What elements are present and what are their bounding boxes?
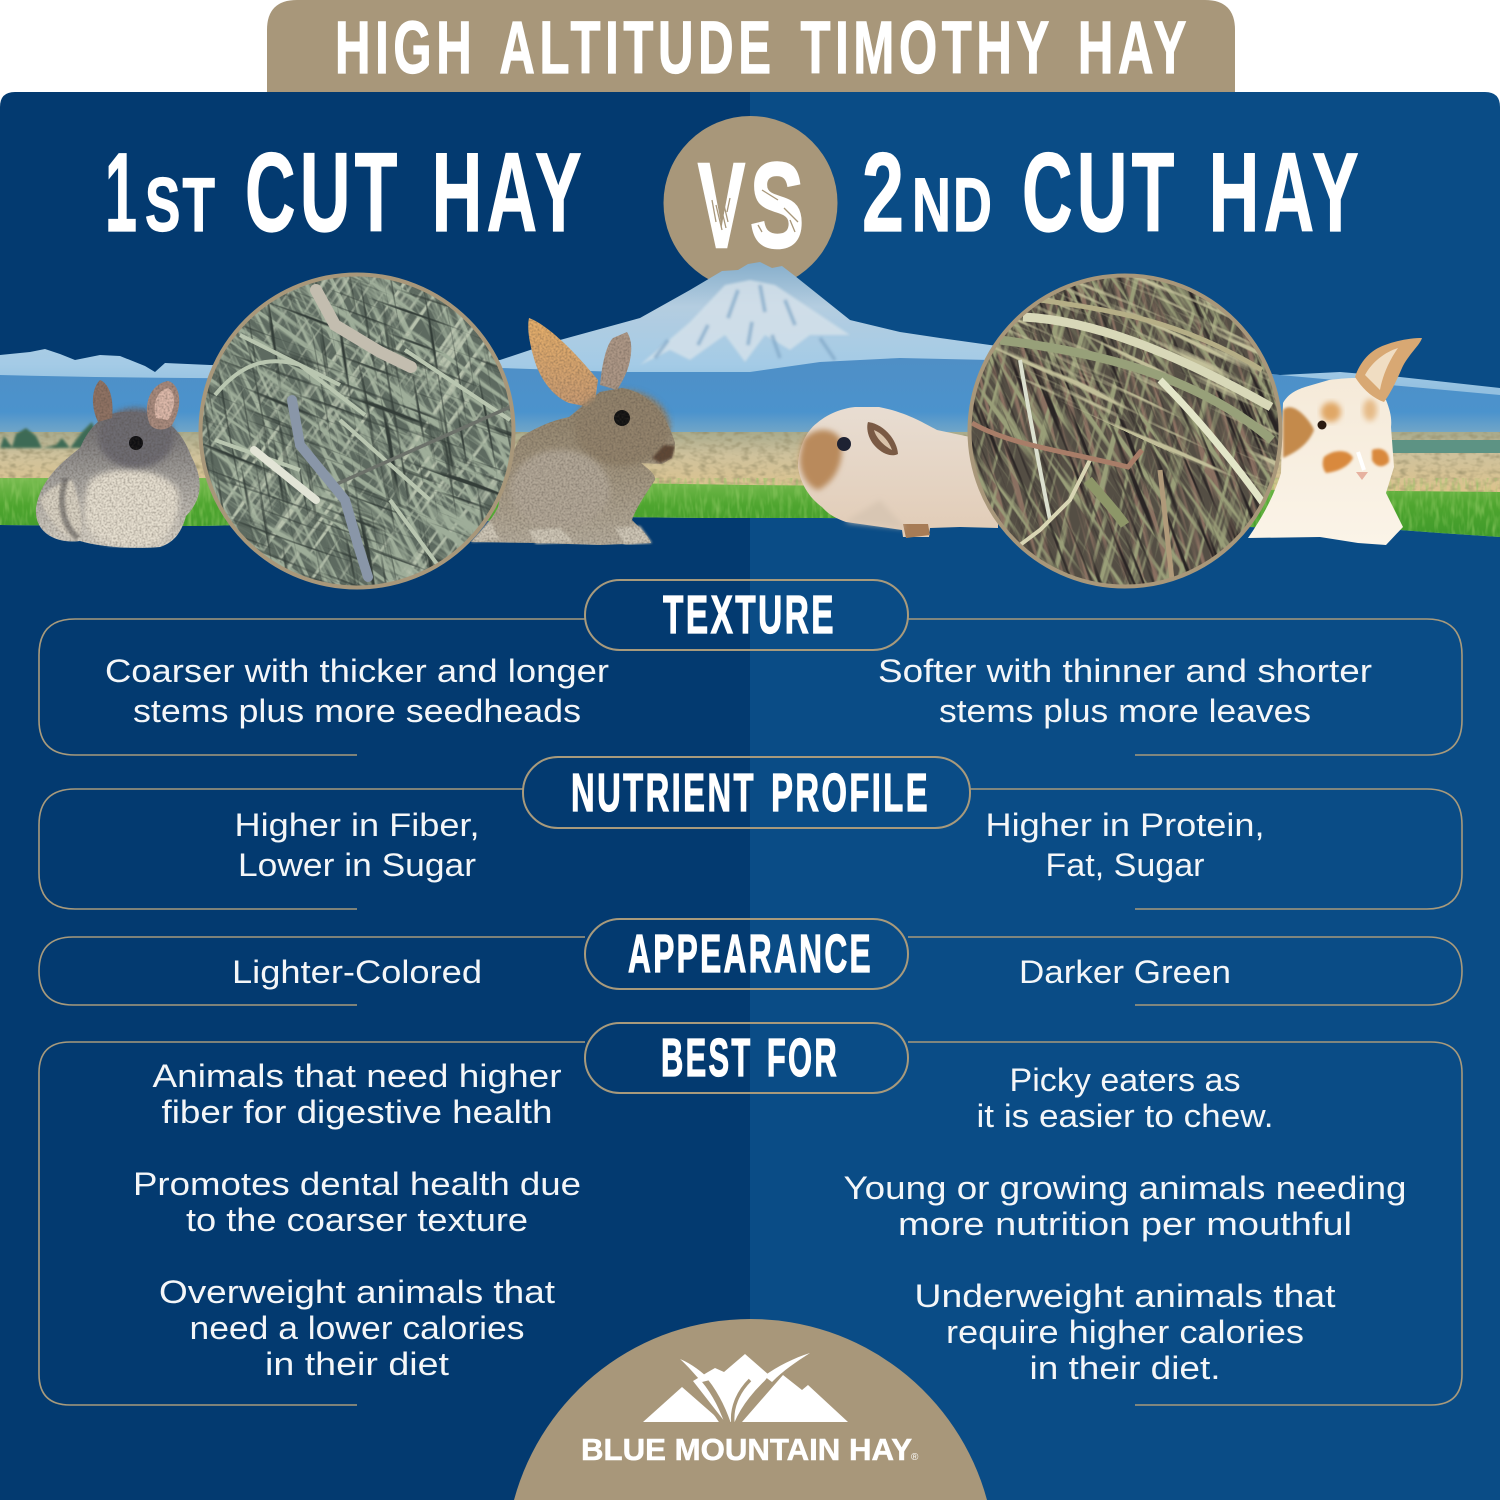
- pill: nutrient profile: [523, 757, 970, 828]
- heading: 2nd cut hay: 2: [862, 130, 904, 255]
- text: 1st cut best for: [133, 1058, 581, 1382]
- text: 2nd cut best for: Picky eaters as: [1010, 1062, 1240, 1098]
- text: 2nd cut best for: [844, 1062, 1406, 1386]
- section: nutrient profile: [39, 757, 1462, 909]
- light stems: [1023, 317, 1271, 407]
- heading: 1st cut hay: 1: [105, 130, 137, 255]
- text: 1st cut best for: Animals that need higher: [152, 1058, 562, 1094]
- text: 2nd cut texture: Softer with thinner and shorter: [878, 653, 1372, 689]
- pill: appearance: APPEARANCE: [628, 924, 873, 984]
- text: 1st cut best for: Overweight animals that: [159, 1274, 555, 1310]
- panel: background left 1st cut: [0, 92, 750, 1500]
- seedhead: pale: [254, 450, 316, 500]
- text: 2nd cut best for: require higher calories: [946, 1314, 1304, 1350]
- text: 1st cut appearance: Lighter-Colored: [232, 954, 482, 990]
- heading: 1st cut hay: [105, 130, 586, 255]
- logo: Blue Mountain Hay badge: [514, 1319, 987, 1500]
- pill: best for: [585, 1023, 908, 1093]
- panel: background right 2nd cut: [750, 92, 1500, 1500]
- text: 2nd cut nutrients: [986, 807, 1264, 883]
- pill: appearance: [585, 919, 908, 989]
- badge: VS: S: [750, 137, 804, 273]
- pill: texture: [585, 580, 908, 650]
- text: 1st cut texture: stems plus more seedheads: [133, 693, 581, 729]
- animal: white and orange bunny: [1248, 338, 1422, 545]
- animal: chinchilla: [36, 380, 200, 548]
- wordmark: BLUE MOUNTAIN HAY: [581, 1432, 912, 1467]
- section: best for: [39, 1023, 1462, 1405]
- heading: 1st cut hay: CUT HAY: [245, 130, 586, 255]
- badge: VS: [664, 116, 838, 290]
- text: 1st cut best for: Promotes dental health due: [133, 1166, 581, 1202]
- text: 2nd cut best for: more nutrition per mouthful: [898, 1206, 1352, 1242]
- heading: 2nd cut hay: ND: [912, 163, 994, 248]
- text: 1st cut nutrients: Lower in Sugar: [238, 847, 476, 883]
- pill: nutrient profile: NUTRIENT PROFILE: [571, 763, 930, 823]
- text: 2nd cut nutrients: Higher in Protein,: [986, 807, 1264, 843]
- seedhead: dark stem: [330, 407, 510, 487]
- text: 1st cut best for: need a lower calories: [190, 1310, 524, 1346]
- heading: 2nd cut hay: [862, 130, 1363, 255]
- text: 1st cut texture: Coarser with thicker and longer: [105, 653, 609, 689]
- text: 1st cut best for: fiber for digestive health: [162, 1094, 552, 1130]
- hay photo: 1st cut: [198, 272, 516, 590]
- section: texture: [39, 580, 1462, 755]
- seedhead: blue-grey lower: [292, 400, 368, 577]
- text: 2nd cut best for: in their diet.: [1030, 1350, 1220, 1386]
- badge: VS: V: [698, 137, 745, 273]
- text: 2nd cut best for: it is easier to chew.: [976, 1098, 1274, 1134]
- seedhead: tan top: [316, 290, 411, 367]
- icon: mountains and grass: [643, 1353, 848, 1424]
- text: 2nd cut nutrients: Fat, Sugar: [1046, 847, 1205, 883]
- animal: brown rabbit: [471, 318, 675, 545]
- pill: texture: TEXTURE: [663, 585, 836, 645]
- text: 1st cut best for: in their diet: [265, 1346, 449, 1382]
- hay photo: 2nd cut: [968, 274, 1282, 588]
- pill: best for: BEST FOR: [661, 1028, 839, 1088]
- text: 2nd cut best for: Underweight animals that: [914, 1278, 1336, 1314]
- distant trees: [0, 422, 102, 448]
- text: 2nd cut appearance: Darker Green: [1019, 954, 1231, 990]
- landscape: mountain and field band: [0, 262, 1500, 542]
- mountain snow: [640, 280, 850, 365]
- title banner: [267, 0, 1235, 92]
- text: 2nd cut texture: [878, 653, 1372, 729]
- animal: guinea pig: [798, 407, 998, 538]
- section: appearance: [39, 919, 1462, 1005]
- brown stem: [972, 423, 1142, 467]
- text: 1st cut texture: [105, 653, 609, 729]
- text: 2nd cut texture: stems plus more leaves: [939, 693, 1311, 729]
- heading: 1st cut hay: ST: [145, 163, 217, 248]
- text: 1st cut nutrients: [234, 807, 480, 883]
- text: 1st cut nutrients: Higher in Fiber,: [234, 807, 480, 843]
- text: 1st cut best for: to the coarser texture: [186, 1202, 528, 1238]
- registered mark: ®: [911, 1452, 919, 1463]
- text: 2nd cut best for: Young or growing animals needing: [844, 1170, 1406, 1206]
